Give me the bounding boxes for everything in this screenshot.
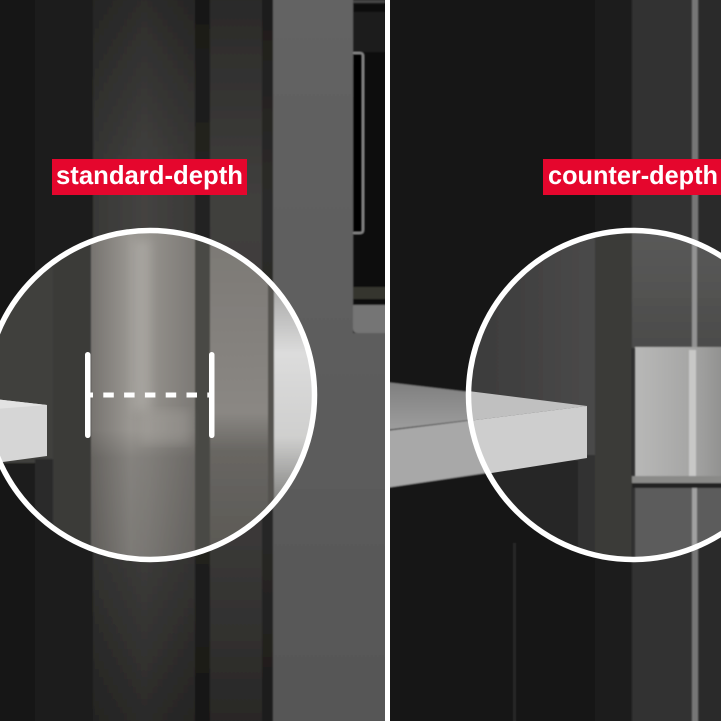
countertop end (0, 399, 47, 463)
magnified circle: counter-depth (471, 233, 721, 557)
depth measurement marker (85, 352, 214, 438)
label: standard-depth: standard-depth (56, 160, 243, 190)
magnified circle: standard-depth (0, 233, 312, 557)
countertop, magnified (471, 392, 587, 473)
circle outline: counter-depth (468, 230, 721, 560)
refrigerator side, unmagnified (35, 0, 385, 721)
divider (385, 0, 390, 721)
label: counter-depth: counter-depth (548, 160, 718, 190)
panel: counter-depth photo (385, 0, 721, 721)
circle outline: standard-depth (0, 230, 314, 560)
cabinets and refrigerator, unmagnified (385, 0, 721, 721)
panel: standard-depth photo (0, 0, 390, 721)
door highlight (133, 240, 151, 410)
